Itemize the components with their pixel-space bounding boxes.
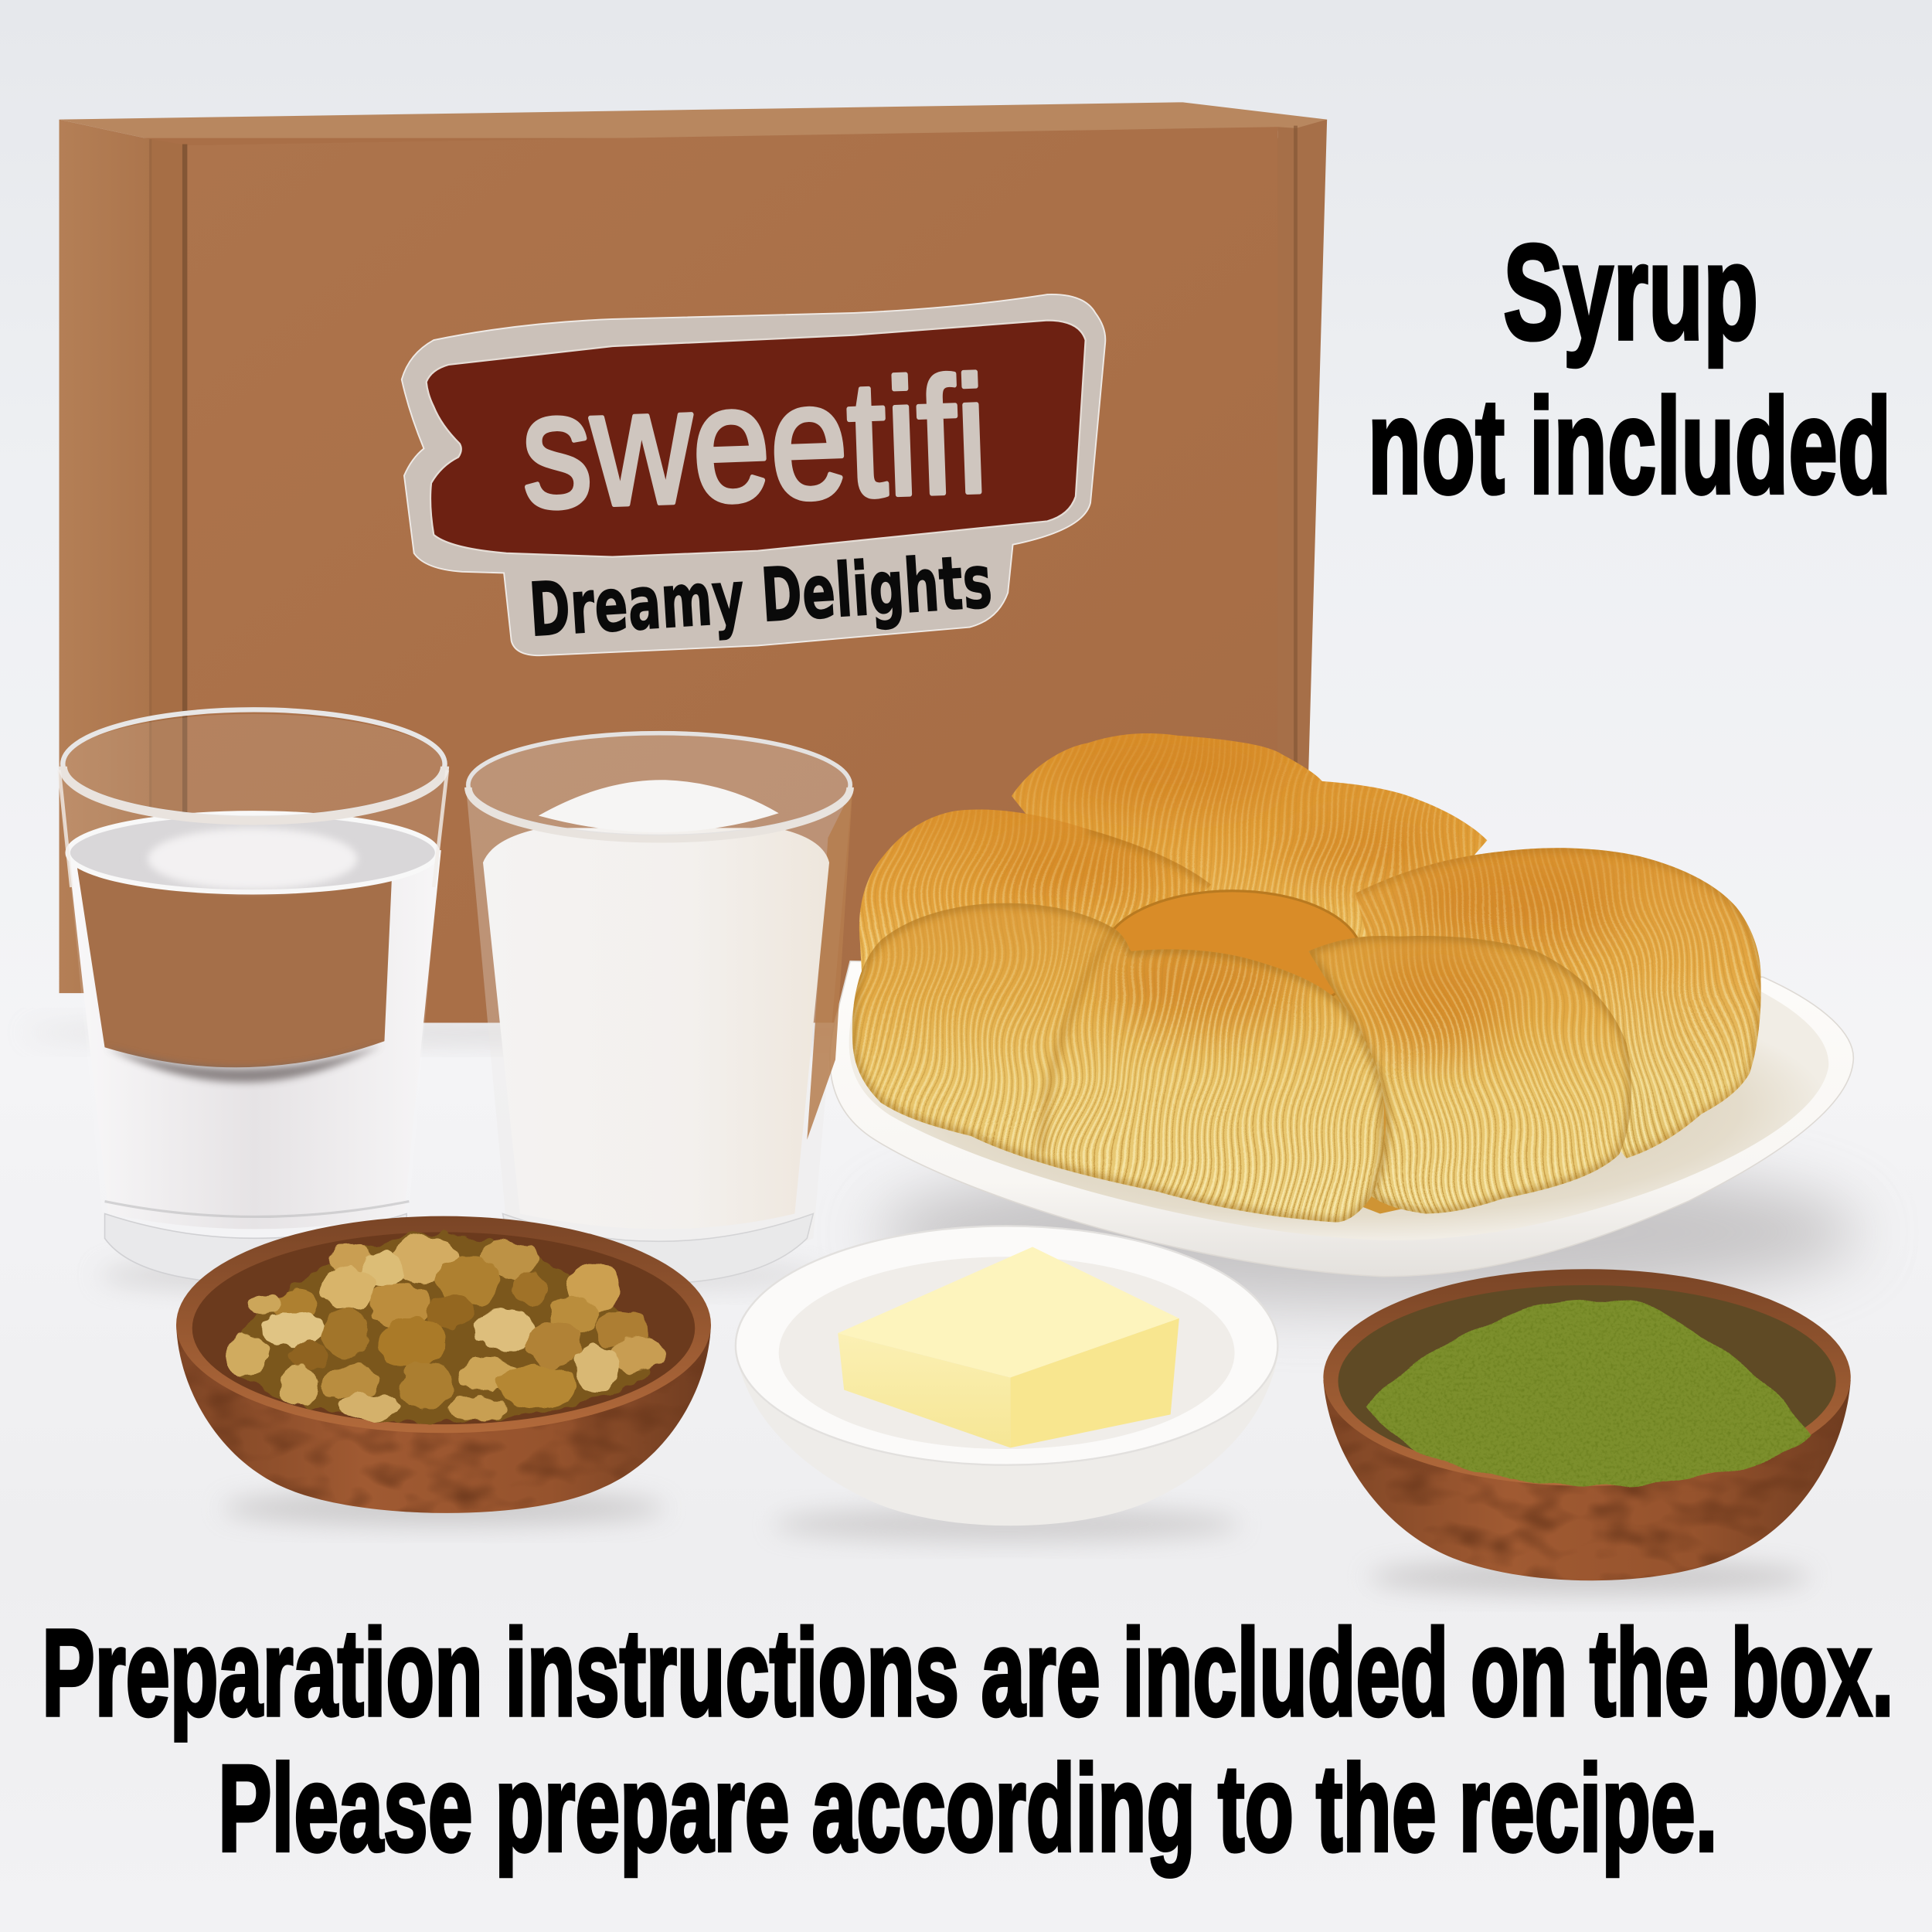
dish of butter bbox=[736, 1226, 1279, 1542]
sugar mound bbox=[539, 780, 779, 832]
glass rim bbox=[468, 733, 850, 837]
box left side panel bbox=[60, 120, 151, 993]
pastry back roll bbox=[1012, 733, 1487, 937]
bowl of walnuts bbox=[176, 1216, 711, 1526]
refracted box in water bbox=[77, 862, 392, 1067]
bowl rim bbox=[176, 1216, 711, 1433]
box front face bbox=[187, 127, 1277, 1022]
note: syrup not included: Syrup bbox=[1503, 216, 1758, 368]
box left inner flap bbox=[151, 139, 187, 1022]
pastry right roll bbox=[1343, 838, 1768, 1165]
glass thick base bbox=[105, 1213, 406, 1284]
bowl of ground pistachio bbox=[1323, 1269, 1851, 1594]
glass of sugar bbox=[466, 733, 852, 1290]
butter block bbox=[838, 1247, 1179, 1447]
logo wordmark: sweetifi bbox=[519, 343, 991, 543]
water surface bbox=[68, 813, 437, 892]
bowl rim bbox=[1323, 1269, 1851, 1486]
pastry left roll bbox=[859, 810, 1211, 971]
logo tagline: Dreamy Delights bbox=[527, 538, 995, 654]
plate of kataifi pastries bbox=[830, 727, 1861, 1306]
walnuts bbox=[224, 1232, 665, 1423]
bowl body bbox=[176, 1325, 711, 1513]
note: syrup not included bbox=[1368, 216, 1891, 522]
glass base bbox=[503, 1213, 813, 1284]
glass rim bbox=[63, 709, 445, 818]
glass body and refraction bbox=[466, 733, 852, 1269]
logo sticker bbox=[402, 294, 1105, 655]
cardboard box bbox=[25, 102, 1355, 1045]
box top flap bbox=[60, 102, 1327, 147]
preparation instructions bbox=[42, 1604, 1894, 1877]
glass body bbox=[60, 714, 447, 1272]
pastry centre roll bbox=[1103, 891, 1362, 1019]
pistachio powder bbox=[1366, 1300, 1811, 1486]
bowl body bbox=[1323, 1380, 1851, 1580]
pastry base bbox=[1109, 887, 1602, 1213]
glass of water bbox=[60, 709, 447, 1293]
dish outer bbox=[736, 1349, 1279, 1526]
box base fill bbox=[123, 138, 1294, 1022]
box right side panel bbox=[1277, 120, 1327, 819]
plate bbox=[830, 961, 1853, 1277]
pastry front right roll bbox=[1300, 930, 1639, 1219]
pastry front big roll bbox=[844, 897, 1393, 1227]
logo red banner bbox=[427, 321, 1086, 557]
water body bbox=[68, 850, 441, 1229]
sugar fill bbox=[483, 828, 829, 1229]
plate well bbox=[849, 974, 1828, 1240]
